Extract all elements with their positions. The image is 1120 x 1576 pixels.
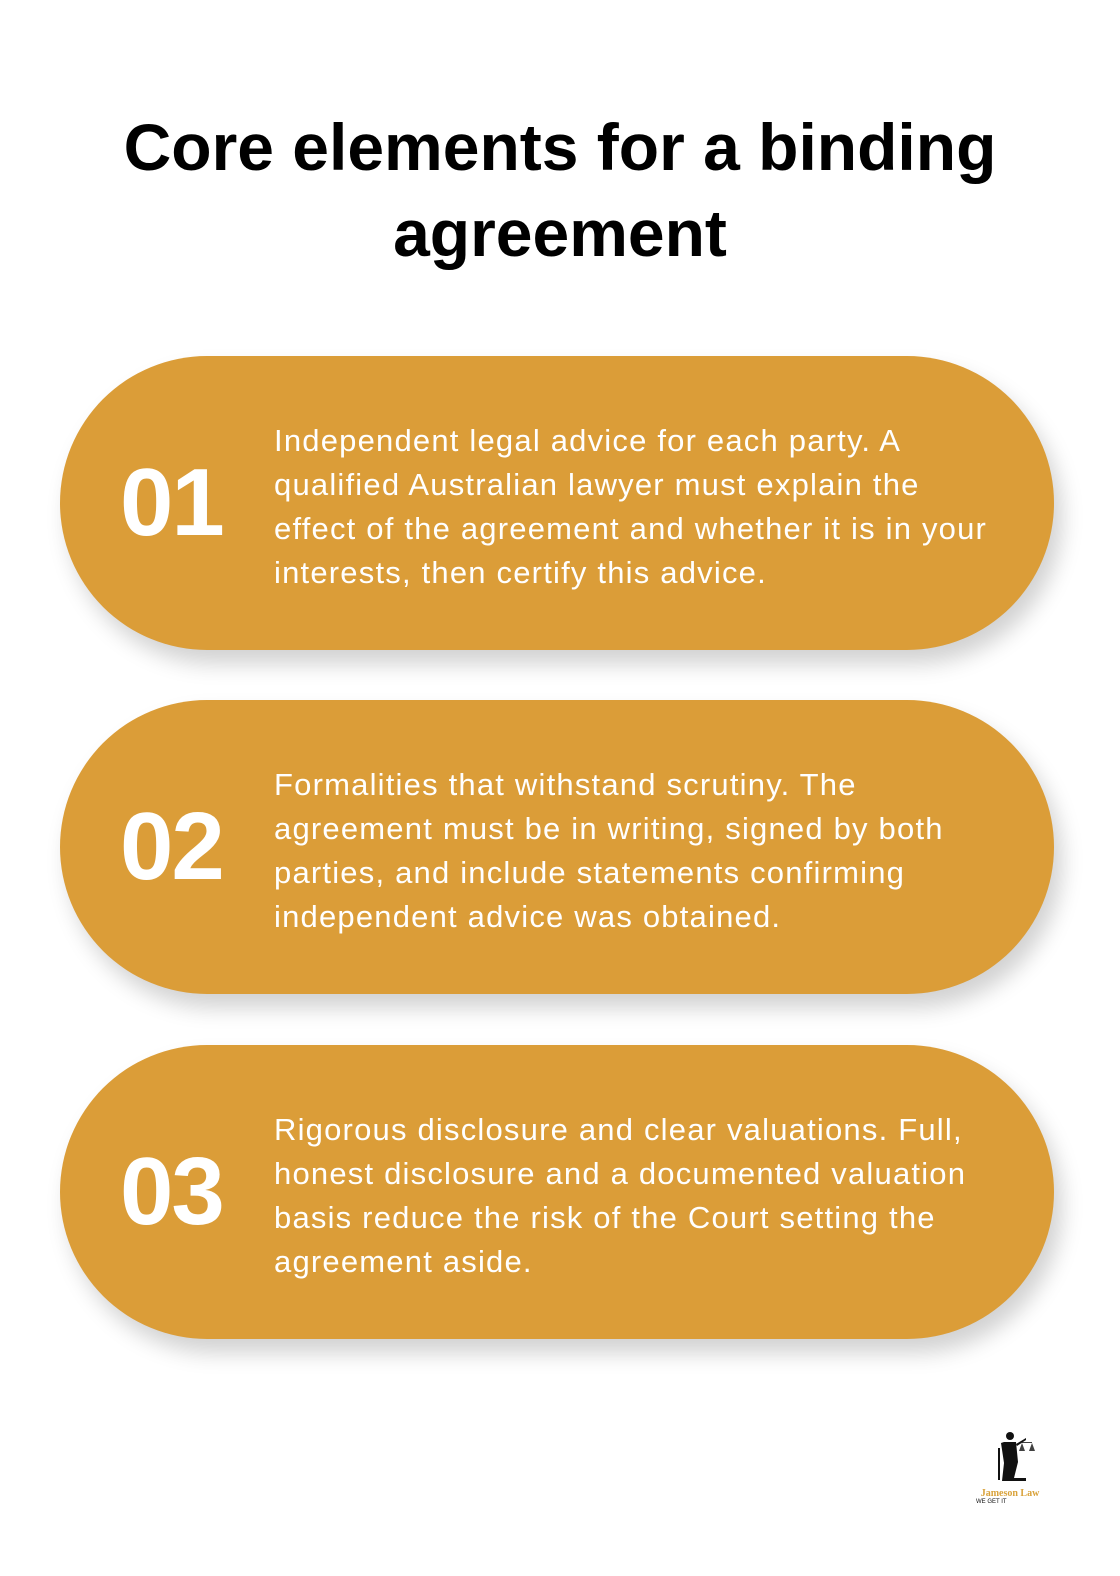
text 01: effect of the agreement and whether it is in your (274, 511, 987, 546)
logo: WE GET IT (976, 1499, 1007, 1505)
logo: Jameson Law (981, 1488, 1039, 1499)
number 01: 01 (120, 449, 223, 556)
text 02: agreement must be in writing, signed by both (274, 811, 944, 846)
title: Core elements for a binding (124, 110, 996, 184)
text 03 (274, 1112, 966, 1279)
panel: item 02 (60, 700, 1054, 994)
text 01 (274, 423, 987, 590)
text 03: basis reduce the risk of the Court setting the (274, 1200, 936, 1235)
text 02: Formalities that withstand scrutiny. The (274, 767, 857, 802)
text 01: Independent legal advice for each party. A (274, 423, 901, 458)
title: agreement (393, 196, 727, 270)
panel: item 01 (60, 356, 1054, 650)
text 01: qualified Australian lawyer must explain the (274, 467, 920, 502)
text 01: interests, then certify this advice. (274, 555, 767, 590)
text 02: independent advice was obtained. (274, 899, 781, 934)
text 02 (274, 767, 944, 934)
text 02: parties, and include statements confirming (274, 855, 905, 890)
logo (976, 1432, 1040, 1505)
number 02: 02 (120, 793, 223, 900)
number 03: 03 (120, 1138, 223, 1245)
text 03: Rigorous disclosure and clear valuations. Full, (274, 1112, 963, 1147)
panel: item 03 (60, 1045, 1054, 1339)
text 03: agreement aside. (274, 1244, 533, 1279)
title (124, 110, 996, 270)
text 03: honest disclosure and a documented valuation (274, 1156, 966, 1191)
